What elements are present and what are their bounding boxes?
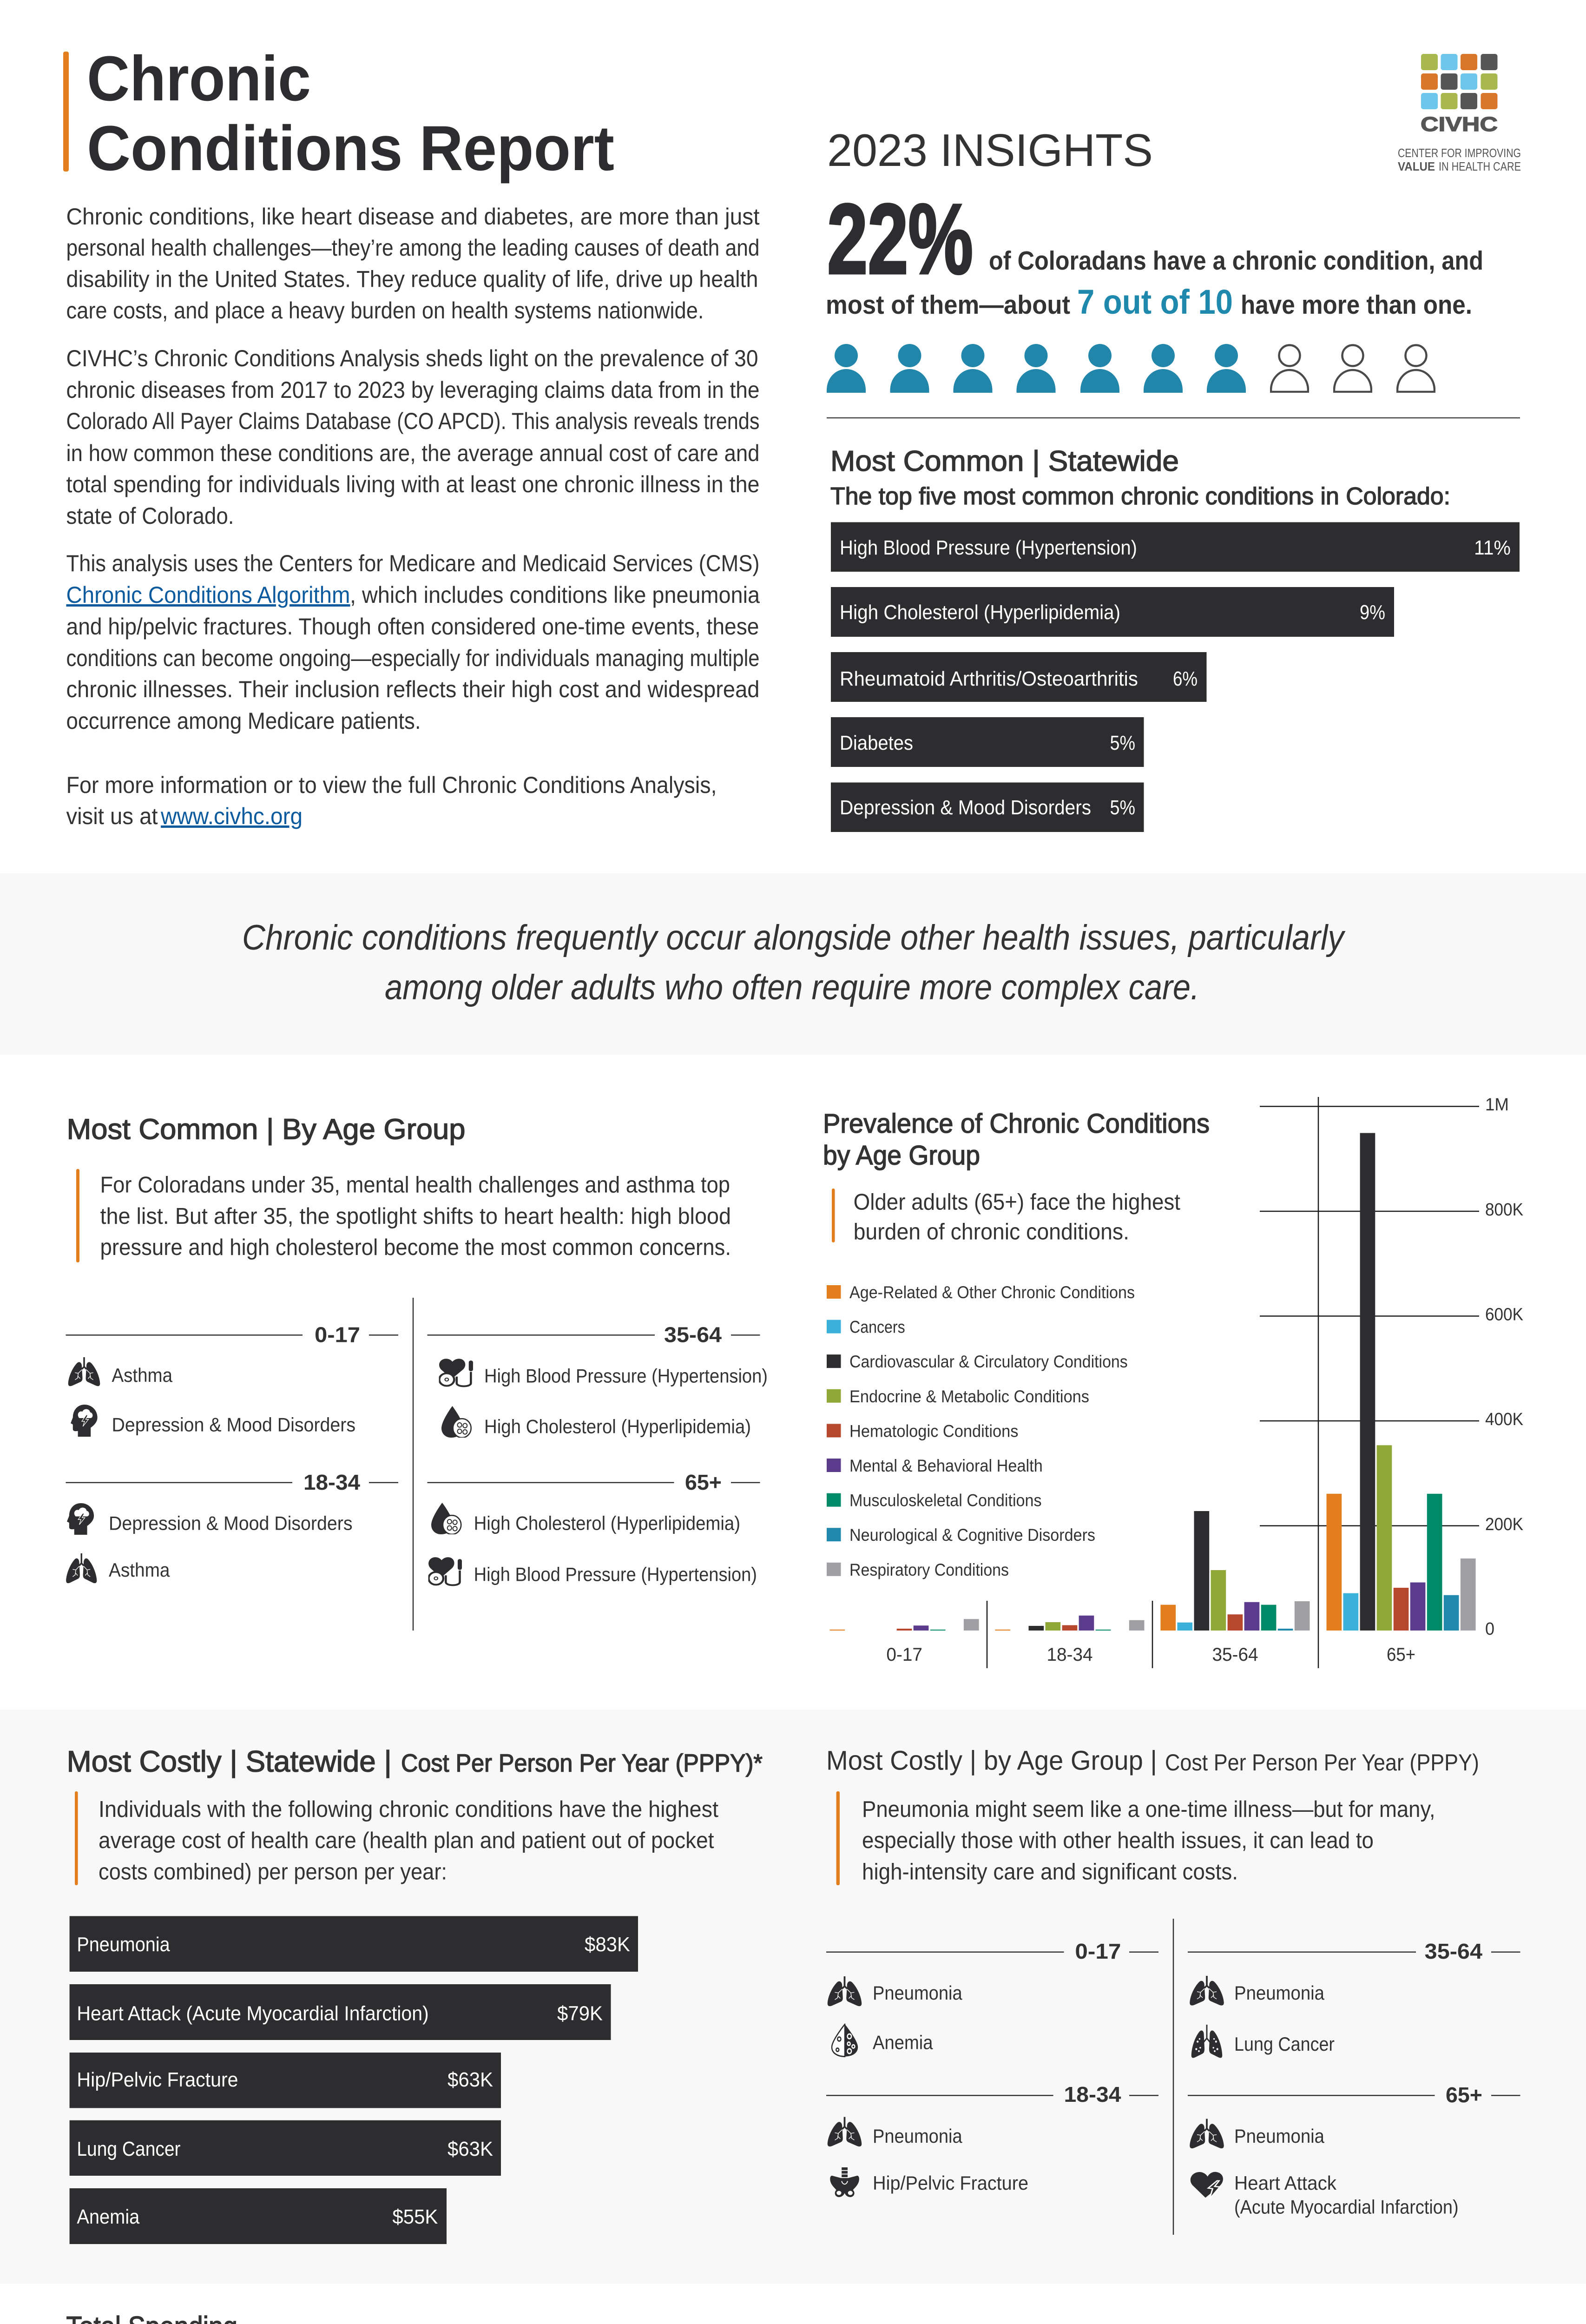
heading: Most Costly | by Age Group | (826, 1746, 1157, 1776)
age group 65+ (428, 1470, 760, 1585)
bar chart: most costly conditions: Anemia (77, 2205, 140, 2228)
bar chart: top five conditions (831, 522, 1520, 832)
callout text (100, 1172, 731, 1260)
cost age group 65+: (Acute Myocardial Infarction) (1234, 2196, 1459, 2218)
heading (823, 1109, 1210, 1171)
panel: quote band: Chronic conditions frequently occur alongside other health issues, particularly (242, 918, 1346, 957)
callout text: Individuals with the following chronic conditions have the highest (99, 1797, 718, 1822)
title accent bar (63, 52, 69, 172)
legend: Neurological & Cognitive Disorders (849, 1525, 1095, 1545)
bar chart: prevalence by age: 35-64 (1212, 1644, 1258, 1665)
bar chart: top five conditions: Rheumatoid Arthritis/Osteoarthritis (840, 667, 1138, 690)
intro paragraph 3: conditions can become ongoing—especially for individuals managing multiple (66, 645, 759, 671)
bar chart: most costly conditions: Lung Cancer (77, 2138, 180, 2160)
intro paragraph 3: , which includes conditions like pneumonia (350, 582, 760, 608)
intro paragraph 3: chronic illnesses. Their inclusion reflects their high cost and widespread (66, 676, 759, 702)
callout text: Older adults (65+) face the highest (854, 1190, 1180, 1215)
cost age group 0-17: Anemia (873, 2032, 933, 2053)
intro paragraph 3: and hip/pelvic fractures. Though often considered one-time events, these (66, 614, 759, 640)
bar chart: prevalence by age: 0-17 (886, 1644, 922, 1665)
intro paragraph 2: CIVHC’s Chronic Conditions Analysis sheds light on the prevalence of 30 (66, 345, 758, 371)
intro paragraph 1: Chronic conditions, like heart disease and diabetes, are more than just (66, 204, 760, 230)
bar chart: most costly conditions: $63K (448, 2068, 493, 2091)
bar chart: most costly conditions: Heart Attack (Acute Myocardial Infarction) (77, 2002, 429, 2025)
cost age group 18-34: Hip/Pelvic Fracture (873, 2172, 1028, 2194)
age group 0-17: 0-17 (315, 1323, 360, 1347)
legend: Respiratory Conditions (849, 1560, 1009, 1579)
heading: Cost Per Person Per Year (PPPY)* (401, 1750, 763, 1777)
callout text: For Coloradans under 35, mental health challenges and asthma top (100, 1172, 730, 1197)
cost age group 0-17: 0-17 (1075, 1939, 1121, 1963)
heading (826, 1746, 1479, 1776)
age group 18-34: 18-34 (303, 1470, 360, 1494)
callout bar (76, 1169, 79, 1262)
bars: 65+ (1326, 1133, 1476, 1631)
title: Chronic (87, 43, 311, 114)
title (87, 43, 614, 184)
age group 35-64 (428, 1323, 768, 1438)
bars: 35-64 (1160, 1511, 1310, 1631)
legend: Musculoskeletal Conditions (849, 1491, 1042, 1510)
bar chart: most costly conditions (70, 1916, 638, 2244)
bar chart: most costly conditions: Pneumonia (77, 1933, 170, 1956)
bar chart: prevalence by age (830, 1095, 1523, 1668)
panel: prevalence by age group (823, 1095, 1523, 1668)
intro paragraph 2: total spending for individuals living with at least one chronic illness in the (66, 471, 759, 497)
bar chart: top five conditions: High Blood Pressure (Hypertension) (840, 536, 1137, 559)
intro paragraph 3: occurrence among Medicare patients. (66, 708, 421, 734)
heading: Most Common | Statewide (830, 445, 1179, 477)
callout bar (75, 1791, 78, 1885)
bar chart: prevalence by age: 0 (1485, 1619, 1494, 1639)
heading: Most Costly | Statewide | (67, 1745, 392, 1778)
bar chart: prevalence by age: 600K (1485, 1305, 1523, 1325)
cost age group 0-17: Pneumonia (873, 1982, 962, 2004)
logo: CIVHC: IN HEALTH CARE (1439, 159, 1521, 173)
icon row: 7 of 10 people (827, 344, 1435, 393)
intro paragraph 2: in how common these conditions are, the average annual cost of care and (66, 440, 759, 466)
bar chart: prevalence by age: 1M (1485, 1095, 1509, 1115)
age group 18-34: Asthma (109, 1559, 170, 1581)
callout text (99, 1797, 718, 1884)
callout text: pressure and high cholesterol become the most common concerns. (100, 1235, 731, 1260)
callout bar (832, 1188, 835, 1242)
section band: most costly (0, 1710, 1586, 2284)
cost age group 35-64: Pneumonia (1234, 1982, 1325, 2004)
cost age group 35-64: 35-64 (1425, 1939, 1482, 1963)
bars: 18-34 (995, 1616, 1144, 1631)
stat sentence: 7 out of 10 (1077, 283, 1233, 321)
cost age group 18-34: Pneumonia (873, 2125, 962, 2147)
bar chart: top five conditions: High Cholesterol (Hyperlipidemia) (840, 601, 1120, 624)
callout bar (836, 1791, 840, 1885)
intro paragraph 1: personal health challenges—they’re among the leading causes of death and (66, 235, 759, 261)
cost age group 65+: Heart Attack (1234, 2172, 1337, 2194)
panel: 2023 insights (826, 125, 1520, 418)
logo: CIVHC: CENTER FOR IMPROVING (1398, 146, 1521, 160)
heading: Prevalence of Chronic Conditions (823, 1109, 1210, 1139)
logo: CIVHC: CIVHC (1421, 113, 1498, 136)
bar chart: top five conditions: 9% (1360, 601, 1385, 624)
stat sentence: most of them—about (826, 290, 1070, 320)
intro paragraph 2: Colorado All Payer Claims Database (CO APCD). This analysis reveals trends (66, 408, 759, 434)
age group 0-17: Depression & Mood Disorders (112, 1414, 355, 1436)
callout text: the list. But after 35, the spotlight shifts to heart health: high blood (100, 1204, 731, 1229)
stat sentence (826, 246, 1483, 321)
heading: 2023 insights: 2023 INSIGHTS (827, 125, 1153, 176)
bar chart: top five conditions: Diabetes (840, 732, 913, 754)
panel: quote band (0, 873, 1586, 1055)
intro paragraph 2 (66, 345, 759, 529)
heading: by Age Group (823, 1141, 980, 1171)
intro paragraph 1 (66, 204, 760, 324)
callout text: high-intensity care and significant costs. (862, 1859, 1238, 1884)
intro paragraph 2: state of Colorado. (66, 503, 234, 529)
bar chart: prevalence by age: 200K (1485, 1515, 1523, 1534)
stat: 22%: 22% (827, 184, 973, 295)
panel: most common statewide (830, 445, 1520, 832)
bar chart: most costly conditions: $83K (585, 1933, 630, 1956)
age group 35-64: High Cholesterol (Hyperlipidemia) (484, 1416, 751, 1438)
heading (67, 1745, 763, 1778)
subheading: The top five most common chronic conditions in Colorado: (830, 483, 1450, 510)
bar chart: prevalence by age: 18-34 (1046, 1644, 1093, 1665)
legend: Cancers (849, 1318, 905, 1337)
title: Conditions Report (87, 113, 614, 184)
age group 35-64: High Blood Pressure (Hypertension) (484, 1365, 768, 1386)
more information text: For more information or to view the full Chronic Conditions Analysis, (66, 772, 717, 798)
age group 18-34: Depression & Mood Disorders (109, 1512, 352, 1534)
bar chart: top five conditions: 6% (1173, 667, 1198, 690)
more information text: www.civhc.org (160, 803, 303, 829)
callout text (854, 1190, 1180, 1245)
callout text: Pneumonia might seem like a one-time illness—but for many, (862, 1797, 1435, 1822)
bar chart: most costly conditions: Hip/Pelvic Fracture (77, 2068, 238, 2091)
age group 0-17 (66, 1323, 398, 1437)
panel: report intro (63, 43, 760, 829)
age group 18-34 (66, 1470, 398, 1583)
callout text: burden of chronic conditions. (854, 1220, 1129, 1245)
intro paragraph 3 (66, 550, 760, 734)
cost age group 18-34: 18-34 (1064, 2082, 1121, 2106)
intro paragraph 1: care costs, and place a heavy burden on health systems nationwide. (66, 297, 704, 324)
bar chart: prevalence by age: 65+ (1387, 1644, 1415, 1665)
panel: most costly statewide (67, 1745, 763, 2244)
bars: 0-17 (830, 1619, 979, 1631)
age group 65+: High Cholesterol (Hyperlipidemia) (474, 1512, 740, 1534)
bar chart: top five conditions: 11% (1474, 536, 1511, 559)
intro paragraph 2: chronic diseases from 2017 to 2023 by leveraging claims data from in the (66, 377, 759, 403)
panel: most common by age group (66, 1114, 768, 1631)
legend: Hematologic Conditions (849, 1421, 1019, 1440)
more information text (66, 772, 717, 829)
bar chart: prevalence by age: 800K (1485, 1200, 1523, 1220)
heading: Most Common | By Age Group (67, 1114, 466, 1146)
legend: Cardiovascular & Circulatory Conditions (849, 1352, 1128, 1371)
cost age group 65+: 65+ (1446, 2083, 1482, 2107)
age group 65+: 65+ (685, 1470, 722, 1494)
stat sentence: have more than one. (1241, 290, 1472, 320)
intro paragraph 1: disability in the United States. They reduce quality of life, drive up health (66, 266, 758, 292)
bar chart: top five conditions: 5% (1110, 796, 1135, 819)
panel: quote band: among older adults who often require more complex care. (385, 968, 1199, 1007)
cost age group 18-34 (826, 2082, 1158, 2197)
logo: CIVHC (1398, 54, 1521, 173)
bar chart: prevalence by age: 400K (1485, 1410, 1523, 1429)
legend: Age-Related & Other Chronic Conditions (849, 1283, 1135, 1302)
callout text: especially those with other health issues, it can lead to (862, 1828, 1374, 1853)
cost age group 35-64 (1188, 1939, 1520, 2058)
callout text (862, 1797, 1435, 1884)
cost age group 35-64: Lung Cancer (1234, 2033, 1335, 2055)
bar chart: most costly conditions: $63K (448, 2138, 493, 2160)
cost age group 65+ (1188, 2083, 1520, 2218)
bar chart: top five conditions: Depression & Mood Disorders (840, 796, 1091, 819)
legend: Mental & Behavioral Health (849, 1456, 1043, 1475)
callout text: costs combined) per person per year: (99, 1859, 447, 1884)
age group 35-64: 35-64 (664, 1323, 722, 1347)
legend (827, 1283, 1135, 1579)
intro paragraph 3: Chronic Conditions Algorithm (66, 582, 350, 608)
callout text: average cost of health care (health plan and patient out of pocket (99, 1828, 714, 1853)
logo: CIVHC: VALUE (1398, 159, 1435, 173)
stat sentence: of Coloradans have a chronic condition, and (989, 246, 1483, 276)
panel: most costly by age group (826, 1746, 1520, 2235)
more information text: visit us at (66, 803, 158, 829)
heading: Cost Per Person Per Year (PPPY) (1165, 1750, 1479, 1776)
age group 65+: High Blood Pressure (Hypertension) (474, 1564, 757, 1585)
bar chart: most costly conditions: $79K (557, 2002, 603, 2025)
bar chart: most costly conditions: $55K (392, 2205, 438, 2228)
bar chart: top five conditions: 5% (1110, 732, 1135, 754)
cost age group 65+: Pneumonia (1234, 2125, 1325, 2147)
age group 0-17: Asthma (112, 1364, 173, 1386)
cost age group 0-17 (826, 1939, 1158, 2057)
intro paragraph 3: This analysis uses the Centers for Medicare and Medicaid Services (CMS) (66, 550, 759, 576)
legend: Endocrine & Metabolic Conditions (849, 1387, 1089, 1406)
